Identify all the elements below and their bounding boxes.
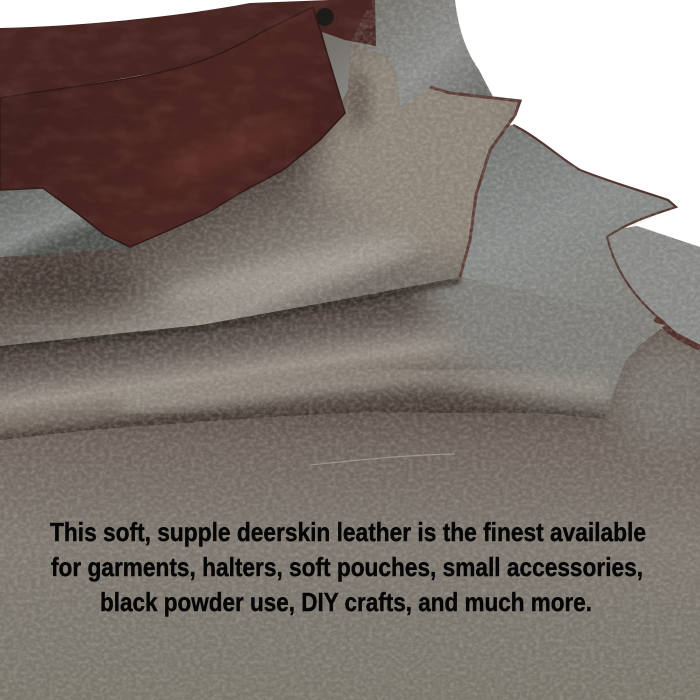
caption text: black powder use, DIY crafts, and much more. [100, 587, 592, 617]
base pebbled leather [0, 300, 700, 700]
right leather sheet behind [600, 226, 700, 350]
dark soft shadow on left of fold [0, 263, 145, 307]
lower leather fold band [0, 277, 665, 440]
small dark snap detail [316, 8, 334, 26]
soft highlight on fold [166, 242, 410, 304]
suede nap texture [0, 0, 374, 234]
beige right part of fold [310, 30, 530, 265]
left grey flap [0, 185, 140, 257]
caption text [50, 517, 646, 617]
torn brown edge [513, 125, 676, 323]
back suede hide [0, 0, 378, 98]
suede highlight [151, 107, 309, 193]
thick brown tear at right [655, 318, 700, 348]
right side blend into grey leather [405, 277, 665, 418]
middle leather fold [0, 30, 530, 350]
highlight on band [120, 378, 610, 405]
right main leather panel [340, 125, 700, 418]
crease line in lower leather [310, 454, 455, 465]
upper grey leather fold [322, 0, 493, 125]
shaded pocket of upper fold [346, 70, 370, 130]
shadow along band top [0, 280, 460, 347]
shadow along band bottom [0, 412, 610, 442]
brown fold edge [430, 87, 520, 277]
pebbled grain on lower hide [0, 405, 600, 438]
grey tone at right of hide [610, 340, 700, 450]
front suede flap [0, 7, 345, 247]
